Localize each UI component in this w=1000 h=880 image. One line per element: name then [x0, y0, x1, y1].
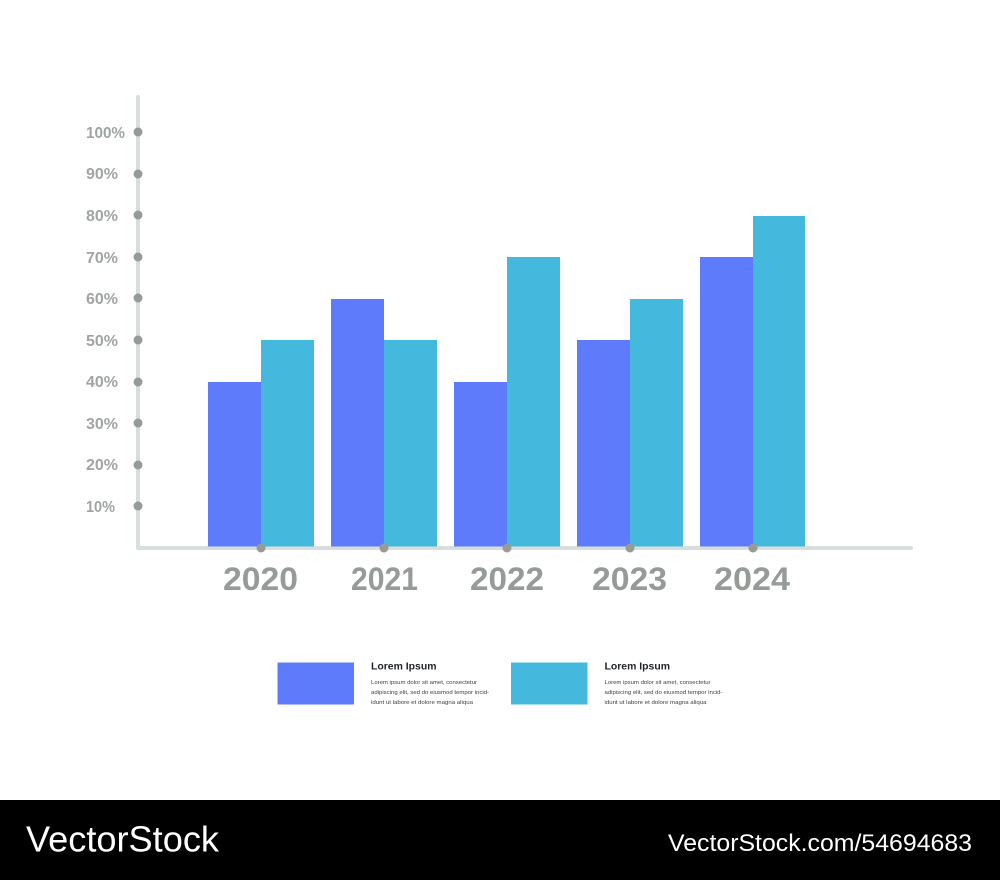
bars: 2021: [331, 299, 437, 546]
footer logo text: VectorStock: [26, 818, 220, 860]
legend text: blue: Lorem ipsum dolor sit amet, consectetur: [371, 680, 477, 686]
y axis: [136, 95, 140, 549]
legend heading: teal: Lorem Ipsum: [604, 660, 670, 672]
bars: 2023: [577, 299, 683, 546]
bar chart: [86, 95, 913, 597]
x axis labels: 2020: [223, 561, 298, 597]
legend text: teal: adipiscing elit, sed do eiusmod tempor incid-: [604, 690, 723, 696]
bars: 2020: [208, 340, 314, 546]
bars: 2024: [700, 216, 805, 546]
x axis markers: [256, 544, 758, 552]
legend heading: blue: Lorem Ipsum: [371, 660, 436, 672]
legend text: teal: idunt ut labore et dolore magna aliqua: [604, 700, 707, 706]
y axis labels: 20%: [86, 457, 118, 474]
y axis labels: 60%: [86, 291, 118, 308]
x axis labels: 2024: [714, 561, 790, 597]
y axis labels: 10%: [86, 499, 115, 516]
y axis labels: [86, 125, 125, 516]
x axis labels: 2022: [470, 561, 544, 597]
legend item: teal series: [511, 660, 723, 706]
y axis labels: 50%: [86, 333, 118, 350]
y axis labels: 80%: [86, 208, 118, 225]
legend text: teal: Lorem ipsum dolor sit amet, consectetur: [604, 680, 711, 686]
x axis labels: 2023: [592, 561, 667, 597]
legend swatch: teal: [511, 662, 588, 704]
y axis markers: [134, 128, 142, 510]
footer url text: VectorStock.com/54694683: [668, 830, 972, 857]
legend text: teal: [604, 680, 723, 706]
x axis: [136, 546, 913, 550]
legend swatch: blue: [278, 662, 354, 704]
footer bar: [0, 800, 1000, 880]
legend item: blue series: [278, 660, 489, 706]
legend text: blue: idunt ut labore et dolore magna aliqua: [371, 700, 474, 706]
y axis labels: 70%: [86, 250, 118, 267]
legend text: blue: [371, 680, 489, 706]
y axis labels: 100%: [86, 125, 125, 142]
y axis labels: 90%: [86, 166, 118, 183]
x axis labels: [223, 561, 790, 597]
x axis labels: 2021: [351, 561, 418, 597]
bars: 2022: [454, 257, 560, 546]
y axis labels: 40%: [86, 374, 118, 391]
y axis labels: 30%: [86, 416, 118, 433]
legend text: blue: adipiscing elit, sed do eiusmod tempor incid-: [371, 690, 489, 696]
